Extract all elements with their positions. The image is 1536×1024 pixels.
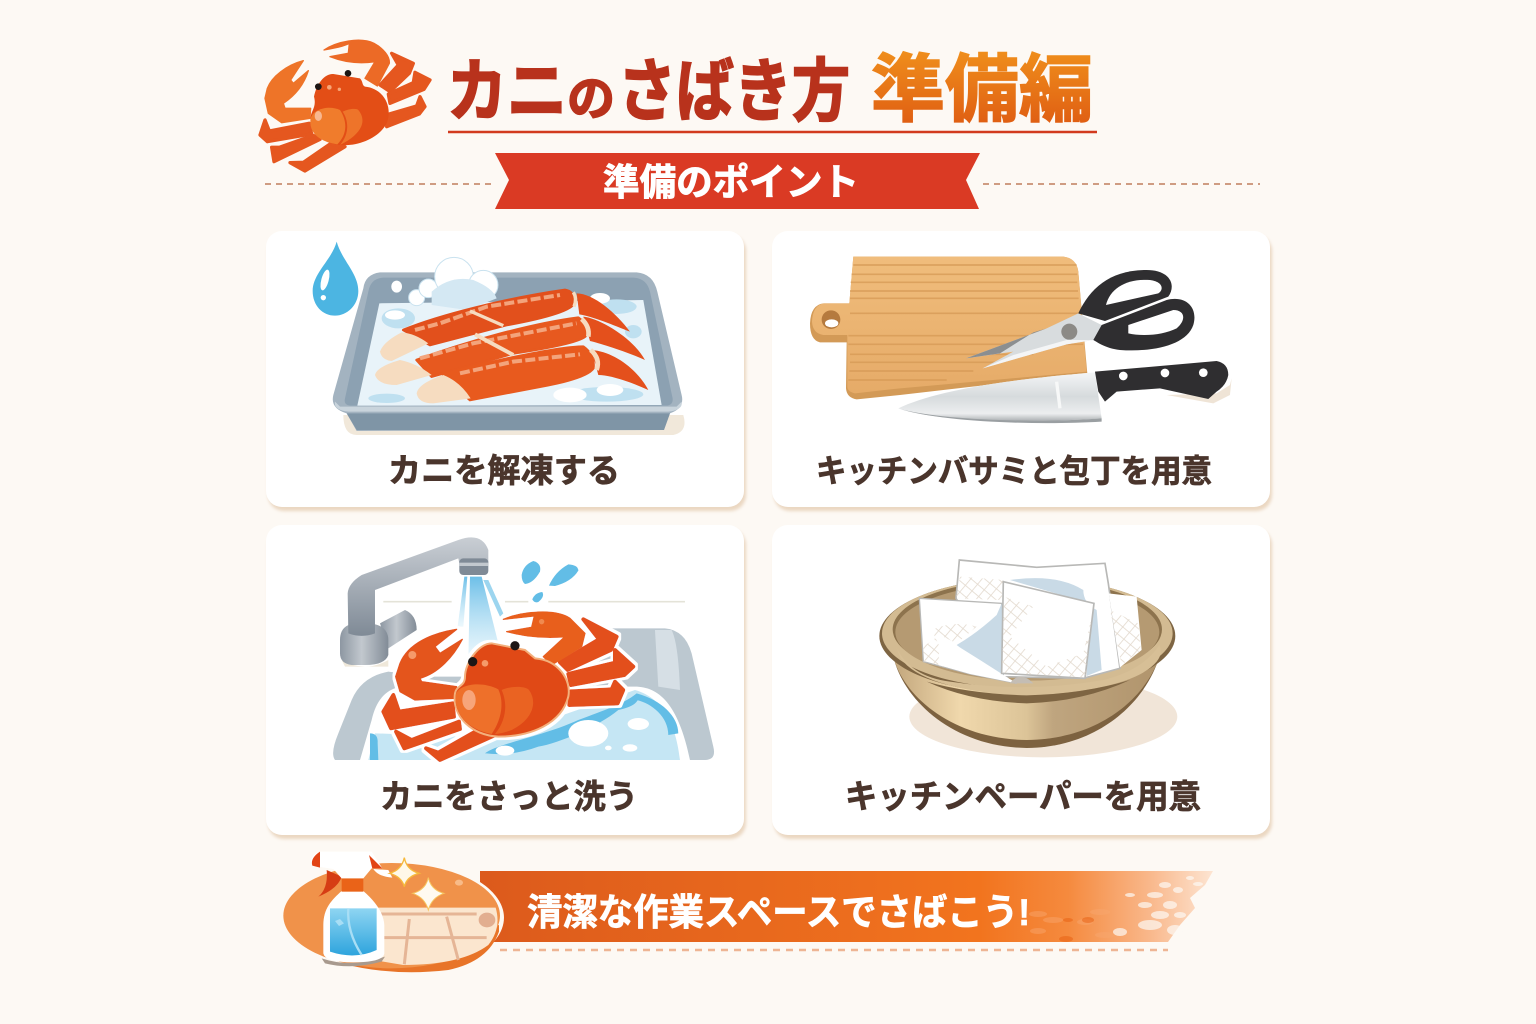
title: さばき方 bbox=[618, 54, 850, 130]
heading ribbon: 準備のポイント: 準備のポイント bbox=[603, 162, 859, 203]
label: カニを解凍する bbox=[388, 452, 620, 489]
paper back bbox=[956, 560, 1120, 678]
label: キッチンバサミと包丁を用意 bbox=[816, 453, 1212, 489]
paper right bbox=[1108, 590, 1142, 667]
paper front bbox=[1002, 582, 1094, 678]
illustration: faucet bbox=[340, 537, 488, 667]
icon: water drop bbox=[313, 242, 358, 316]
brush banner bbox=[480, 871, 1213, 942]
title bbox=[447, 48, 1097, 132]
illustration: cutting board bbox=[810, 257, 1087, 399]
label: キッチンペーパーを用意 bbox=[845, 778, 1201, 815]
icon: crab logo bbox=[260, 40, 430, 171]
foam bbox=[409, 257, 498, 310]
panel: thaw crab bbox=[266, 231, 744, 507]
heading ribbon: 準備のポイント bbox=[495, 153, 980, 209]
illustration: crab legs on tray with water drop bbox=[313, 242, 685, 435]
crab leg 2 bbox=[375, 317, 645, 385]
panel: rinse crab bbox=[266, 525, 744, 835]
illustration: water stream and drops bbox=[458, 561, 578, 662]
crab leg 1 bbox=[380, 290, 630, 361]
icon: spray bottle bbox=[311, 852, 392, 966]
illustration: crab bbox=[383, 612, 633, 760]
illustration: kitchen scissors bbox=[966, 270, 1194, 368]
label: カニをさっと洗う bbox=[380, 778, 638, 815]
title: の bbox=[567, 73, 615, 126]
banner text: 清潔な作業スペースでさばこう! bbox=[527, 892, 1030, 933]
illustration: kitchen knife bbox=[898, 361, 1232, 423]
illustration: bowl with paper towels bbox=[879, 560, 1177, 757]
crab leg 3 bbox=[417, 292, 648, 403]
icon: sparkles bbox=[390, 858, 444, 910]
footer banner bbox=[283, 852, 1213, 975]
paper left bbox=[919, 598, 1017, 683]
panel: scissors and knife bbox=[772, 231, 1270, 507]
illustration: sink and water bbox=[333, 602, 714, 760]
icon: orange oval with tile and spray bbox=[283, 852, 504, 975]
title: カニ bbox=[447, 54, 567, 130]
title: 準備編 bbox=[871, 48, 1093, 131]
panel: kitchen paper bbox=[772, 525, 1270, 835]
